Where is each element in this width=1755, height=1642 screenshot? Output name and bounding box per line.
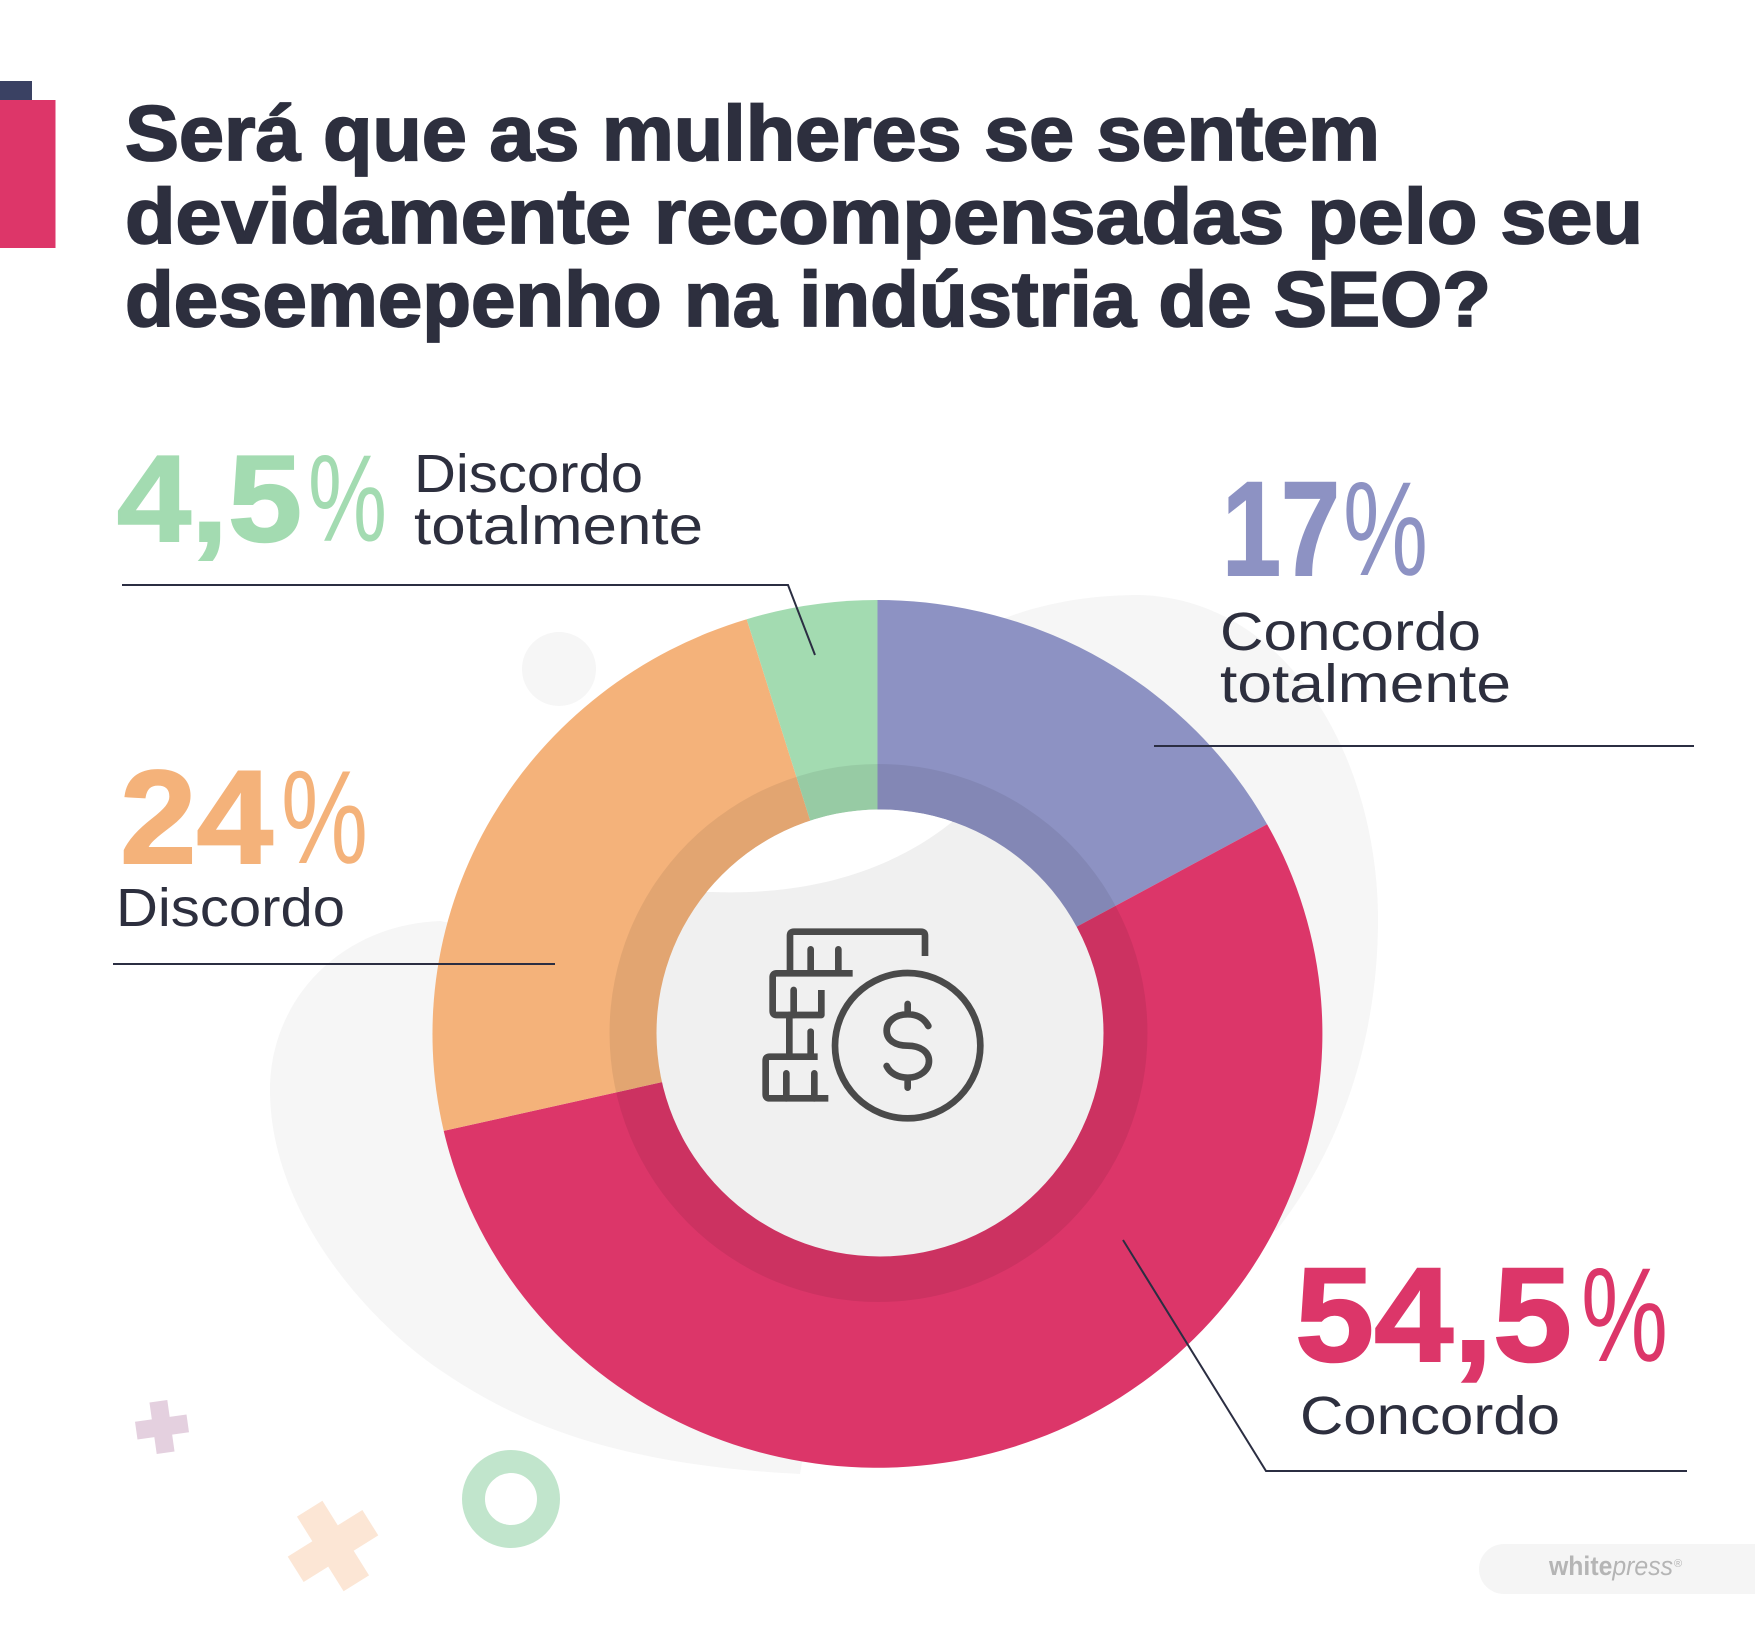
logo: whitepress bbox=[1479, 1544, 1755, 1594]
slice: discordo 24% bbox=[432, 619, 878, 1131]
label: 24% discordo: % bbox=[281, 744, 368, 892]
label: 54,5% concordo bbox=[1123, 1240, 1687, 1471]
label: 24% discordo bbox=[113, 744, 555, 964]
label: 17% concordo totalmente: 17 bbox=[1222, 455, 1340, 604]
label: 24% discordo: Discordo bbox=[116, 878, 345, 938]
icon: coin stacks with dollar bbox=[766, 932, 980, 1118]
label: 24% discordo: 24 bbox=[120, 744, 273, 892]
label: 17% concordo totalmente: totalmente bbox=[1220, 654, 1511, 714]
label: 4,5% discordo totalmente: % bbox=[308, 431, 387, 568]
background blobs bbox=[270, 595, 1378, 1474]
slice: concordo 54,5% bbox=[444, 824, 1322, 1468]
center hole bbox=[650, 800, 1110, 1270]
title: Será que as mulheres se sentem bbox=[125, 89, 1380, 177]
label: 17% concordo totalmente bbox=[1154, 455, 1694, 746]
label: 17% concordo totalmente: % bbox=[1343, 455, 1428, 604]
label: 17% concordo totalmente: Concordo bbox=[1220, 602, 1481, 662]
title bbox=[125, 89, 1643, 343]
label: 4,5% discordo totalmente: 4,5 bbox=[117, 431, 302, 568]
donut chart bbox=[432, 600, 1322, 1468]
logo: whitepress: ® bbox=[1674, 1558, 1682, 1570]
decorative green ring bbox=[474, 1462, 548, 1536]
label: 4,5% discordo totalmente: Discordo bbox=[414, 444, 643, 504]
label: 54,5% concordo: 54,5 bbox=[1295, 1241, 1572, 1390]
decorative orange cross bbox=[272, 1485, 394, 1607]
label: 54,5% concordo: Concordo bbox=[1300, 1386, 1560, 1446]
label: 4,5% discordo totalmente: totalmente bbox=[414, 496, 703, 556]
label: 4,5% discordo totalmente bbox=[117, 431, 815, 655]
slice: concordo totalmente 17% bbox=[878, 600, 1267, 1034]
label: 54,5% concordo: % bbox=[1581, 1241, 1668, 1390]
decorative pink cross bbox=[133, 1398, 191, 1456]
logo: whitepress: whitepress bbox=[1548, 1551, 1673, 1581]
header accent block bbox=[0, 81, 56, 248]
inner shadow ring bbox=[610, 764, 1148, 1302]
title: desemepenho na indústria de SEO? bbox=[125, 255, 1491, 343]
slice: discordo totalmente 4,5% bbox=[747, 600, 878, 1034]
title: devidamente recompensadas pelo seu bbox=[125, 172, 1643, 260]
